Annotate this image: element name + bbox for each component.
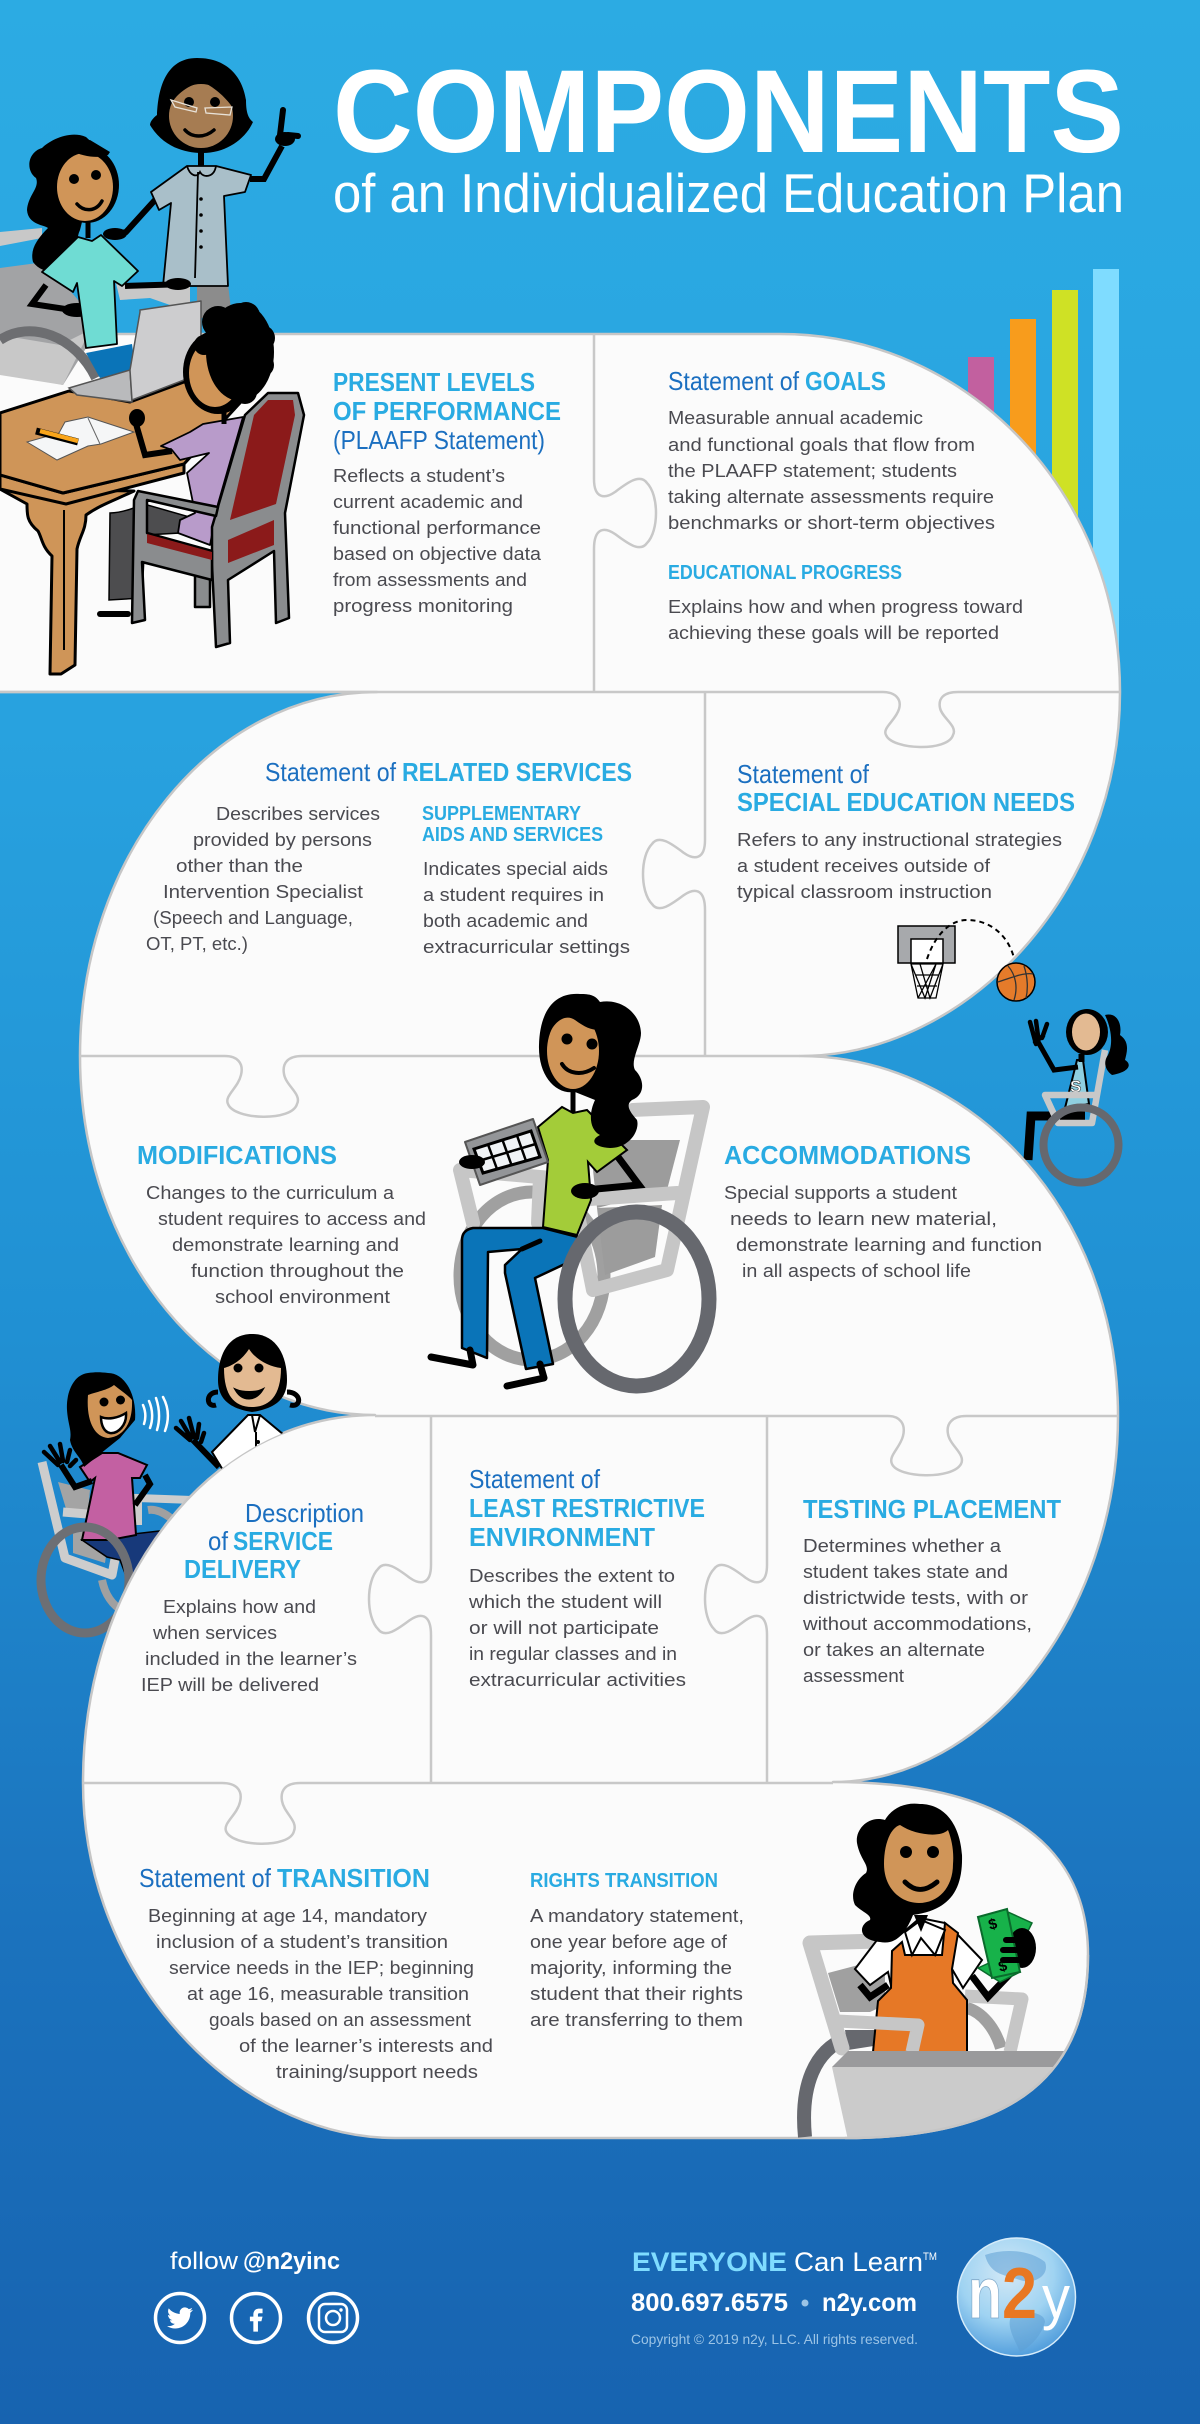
- footer: social media: follow: [170, 2248, 239, 2275]
- panel: statement of goals: Explains how and when progress toward: [668, 597, 1023, 617]
- panel: statement of transition: TRANSITION: [277, 1863, 430, 1893]
- panel: description of service delivery: SERVICE: [233, 1526, 333, 1556]
- panel: description of service delivery: Explains how and: [163, 1597, 316, 1617]
- panel: present levels of performance: PRESENT LEVELS: [333, 367, 535, 397]
- panel: statement of transition: Statement of: [139, 1863, 272, 1893]
- panel: related services: both academic and: [423, 911, 588, 931]
- panel: special education needs: typical classroom instruction: [737, 882, 992, 902]
- panel: accommodations: in all aspects of school life: [742, 1261, 971, 1281]
- panel: present levels of performance: Reflects a student’s: [333, 466, 505, 486]
- panel: rights transition: A mandatory statement,: [530, 1906, 744, 1926]
- panel: statement of goals: EDUCATIONAL PROGRESS: [668, 562, 902, 584]
- panel: statement of goals: [668, 366, 1023, 643]
- money: $: [987, 1915, 1000, 1934]
- panel: present levels of performance: current academic and: [333, 492, 523, 512]
- footer: contact details: 800.697.6575: [631, 2289, 788, 2317]
- money: $: [997, 1957, 1010, 1976]
- panel: present levels of performance: OF PERFORMANCE: [333, 396, 561, 426]
- panel: testing placement: [802, 1494, 1061, 1686]
- logo: n2y globe: y: [1042, 2264, 1070, 2331]
- icon: instagram: [308, 2294, 358, 2342]
- panel: statement of goals: the PLAAFP statement; students: [668, 461, 957, 481]
- panel: statement of transition: [139, 1863, 493, 2082]
- desk: [832, 2051, 1064, 2137]
- panel: testing placement: TESTING PLACEMENT: [803, 1494, 1061, 1524]
- panel: statement of goals: achieving these goals will be reported: [668, 623, 999, 643]
- panel: accommodations: demonstrate learning and function: [736, 1235, 1042, 1255]
- panel: least restrictive environment: Statement of: [469, 1464, 601, 1494]
- panel: least restrictive environment: [468, 1464, 705, 1690]
- panel: least restrictive environment: LEAST RESTRICTIVE: [469, 1493, 705, 1523]
- title: COMPONENTS: [333, 46, 1124, 178]
- panel: rights transition: [530, 1870, 744, 2030]
- panel: statement of goals: GOALS: [805, 366, 886, 396]
- chair: [132, 393, 304, 647]
- panel: accommodations: Special supports a student: [724, 1183, 957, 1203]
- panel: present levels of performance: from assessments and: [333, 570, 527, 590]
- panel: related services: other than the: [176, 856, 303, 876]
- panel: present levels of performance: progress monitoring: [333, 596, 513, 616]
- panel: accommodations: ACCOMMODATIONS: [724, 1140, 971, 1170]
- panel: related services: SUPPLEMENTARY: [422, 803, 582, 825]
- illustration: classroom scene with teacher, students, and table: [0, 58, 304, 674]
- panel: modifications: school environment: [215, 1287, 390, 1307]
- panel: least restrictive environment: extracurricular activities: [469, 1670, 686, 1690]
- panel: statement of goals: and functional goals that flow from: [668, 435, 975, 455]
- logo: n2y globe: n: [968, 2254, 1002, 2334]
- panel: description of service delivery: DELIVERY: [184, 1554, 301, 1584]
- footer: contact details: Can Learn: [794, 2247, 923, 2277]
- wheelchair of girl in teal: [0, 228, 190, 385]
- panel: testing placement: Determines whether a: [803, 1536, 1002, 1556]
- panel: rights transition: are transferring to them: [530, 2010, 743, 2030]
- panel: rights transition: RIGHTS TRANSITION: [530, 1870, 718, 1892]
- money: [978, 1909, 1036, 1982]
- footer: contact details: Copyright © 2019 n2y, LLC. All rights reserved.: [631, 2331, 918, 2347]
- panel: related services: Indicates special aids: [423, 859, 608, 879]
- seated student: [100, 302, 275, 614]
- panel: testing placement: districtwide tests, with or: [803, 1588, 1028, 1608]
- panel: description of service delivery: IEP will be delivered: [141, 1675, 319, 1695]
- panel: modifications: MODIFICATIONS: [137, 1140, 337, 1170]
- panel: statement of transition: inclusion of a student’s transition: [156, 1932, 448, 1952]
- panel: present levels of performance: based on objective data: [333, 544, 542, 564]
- illustration: student in wheelchair waving, top right: S: [1070, 1077, 1081, 1096]
- panel: related services: AIDS AND SERVICES: [422, 824, 603, 846]
- panel: related services: [146, 757, 632, 957]
- bar chart decoration: [968, 269, 1119, 689]
- panel: least restrictive environment: Describes the extent to: [469, 1566, 675, 1586]
- panel: related services: Intervention Specialist: [163, 882, 363, 902]
- panel: special education needs: Statement of: [737, 759, 870, 789]
- panel: least restrictive environment: which the student will: [468, 1592, 662, 1612]
- footer: social media: @n2yinc: [243, 2248, 340, 2275]
- panel: testing placement: without accommodations,: [802, 1614, 1032, 1634]
- panel: present levels of performance: [333, 367, 561, 616]
- panel: statement of goals: Statement of: [668, 366, 800, 396]
- logo: n2y globe: 2: [1002, 2254, 1037, 2334]
- panel: statement of transition: of the learner’s interests and: [239, 2036, 493, 2056]
- icon: basketball hoop and ball: [898, 920, 1035, 1001]
- panel: modifications: function throughout the: [191, 1261, 404, 1281]
- panel: related services: provided by persons: [193, 830, 372, 850]
- panel: description of service delivery: Description: [245, 1498, 364, 1528]
- panel: statement of transition: goals based on an assessment: [209, 2010, 471, 2030]
- panel: present levels of performance: functional performance: [333, 518, 541, 538]
- panel: testing placement: or takes an alternate: [803, 1640, 985, 1660]
- panel: statement of transition: training/support needs: [276, 2062, 478, 2082]
- panel: rights transition: one year before age of: [530, 1932, 728, 1952]
- notebook and pencil: [27, 417, 134, 460]
- panel: accommodations: [724, 1140, 1042, 1281]
- icon: facebook: [232, 2294, 280, 2342]
- panel: special education needs: Refers to any instructional strategies: [737, 830, 1062, 850]
- panel: related services: OT, PT, etc.): [146, 934, 248, 954]
- panel: least restrictive environment: or will not participate: [469, 1618, 659, 1638]
- panel: modifications: demonstrate learning and: [172, 1235, 399, 1255]
- panel: special education needs: a student receives outside of: [737, 856, 991, 876]
- footer: contact details: TM: [923, 2251, 937, 2263]
- illustration: student in wheelchair waving, top right: [1028, 1009, 1129, 1182]
- puzzle panel background: [0, 334, 1120, 2138]
- panel: modifications: [137, 1140, 426, 1307]
- panel: rights transition: student that their rights: [530, 1984, 743, 2004]
- logo: n2y globe: [958, 2238, 1076, 2356]
- illustration: student with communication tablet in wheelchair: [431, 994, 709, 1386]
- panel: description of service delivery: included in the learner’s: [145, 1649, 357, 1669]
- illustration: student with money at desk in wheelchair: [804, 1804, 1120, 2140]
- panel: description of service delivery: [141, 1498, 364, 1695]
- panel: description of service delivery: of: [208, 1526, 229, 1556]
- girl in teal shirt: [27, 135, 191, 348]
- panel: present levels of performance: (PLAAFP Statement): [333, 425, 545, 455]
- panel: statement of transition: service needs in the IEP; beginning: [169, 1958, 474, 1978]
- laptop: [69, 301, 201, 402]
- panel: related services: (Speech and Language,: [153, 908, 353, 928]
- icon: twitter: [156, 2294, 204, 2342]
- panel: modifications: student requires to access and: [158, 1209, 426, 1229]
- illustration: person in pink shirt in wheelchair: [41, 1372, 198, 1633]
- panel: modifications: Changes to the curriculum a: [146, 1183, 395, 1203]
- panel: special education needs: [737, 759, 1075, 902]
- panel: least restrictive environment: in regular classes and in: [469, 1644, 677, 1664]
- panel: statement of transition: at age 16, measurable transition: [187, 1984, 469, 2004]
- panel: rights transition: majority, informing the: [530, 1958, 732, 1978]
- panel: related services: Statement of: [265, 757, 397, 787]
- panel: related services: a student requires in: [423, 885, 604, 905]
- panel: statement of goals: taking alternate assessments require: [668, 487, 994, 507]
- puzzle piece dividers: [0, 334, 1120, 1844]
- teacher: [103, 58, 298, 318]
- panel: testing placement: assessment: [803, 1666, 904, 1686]
- panel: accommodations: needs to learn new material,: [730, 1209, 997, 1229]
- panel: testing placement: student takes state and: [803, 1562, 1008, 1582]
- panel: related services: RELATED SERVICES: [402, 757, 632, 787]
- panel: related services: Describes services: [216, 804, 380, 824]
- illustration: person in white shirt: [174, 1334, 302, 1470]
- title: of an Individualized Education Plan: [333, 162, 1124, 224]
- panel: description of service delivery: when services: [152, 1623, 277, 1643]
- panel: least restrictive environment: ENVIRONMENT: [469, 1522, 655, 1552]
- panel: statement of goals: benchmarks or short-term objectives: [668, 513, 995, 533]
- panel: special education needs: SPECIAL EDUCATION NEEDS: [737, 787, 1075, 817]
- footer: contact details: EVERYONE: [632, 2247, 787, 2277]
- tablet: [465, 1119, 548, 1185]
- footer: contact details: n2y.com: [822, 2289, 917, 2317]
- panel: statement of transition: Beginning at age 14, mandatory: [148, 1906, 427, 1926]
- panel: related services: extracurricular settings: [423, 937, 630, 957]
- table: [0, 382, 250, 674]
- panel: statement of goals: Measurable annual academic: [668, 408, 923, 428]
- footer: social media: [156, 2248, 358, 2342]
- footer: contact details: [631, 2247, 937, 2347]
